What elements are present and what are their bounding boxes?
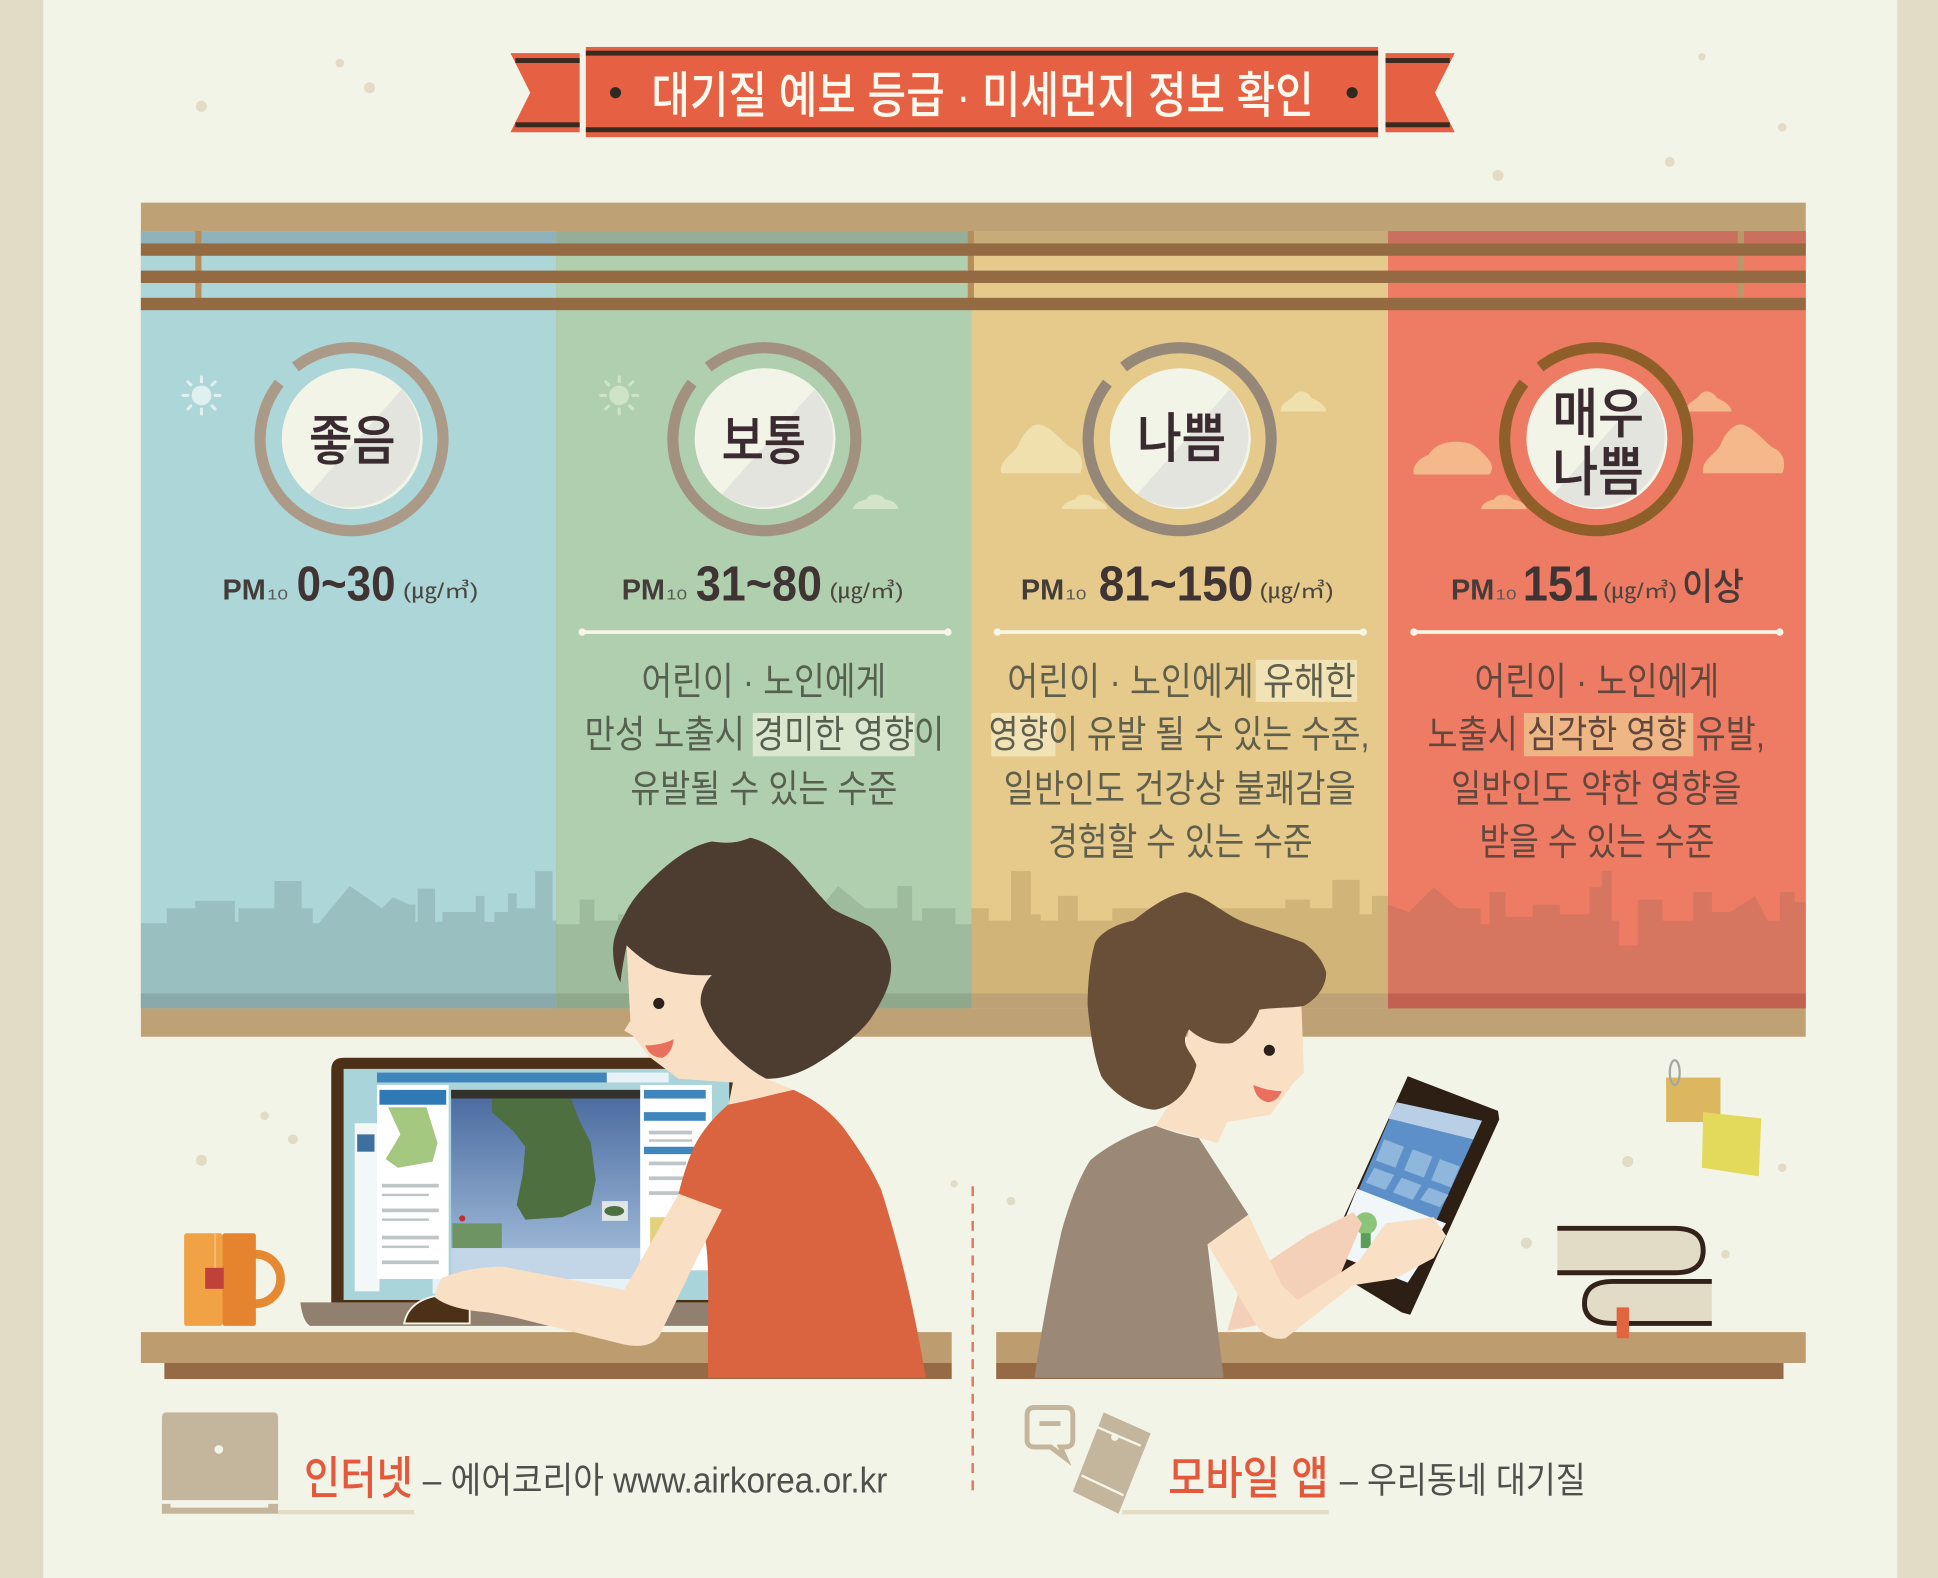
channel detail: – 우리동네 대기질 [1340,1461,1586,1501]
skyline: yellow [971,871,1388,994]
skyline: blue [141,871,556,994]
description: 노출시 심각한 영향 유발, [1428,714,1765,757]
description: 유발될 수 있는 수준 [630,768,897,811]
icon: cloud [853,495,899,509]
grade ring [1088,348,1271,531]
icon: laptop [162,1412,278,1514]
PM value: PM [1021,574,1064,606]
woman shirt [679,1090,926,1378]
browser window back [355,1123,379,1291]
PM value [1021,557,1334,612]
description: 영향이 유발 될 수 있는 수준, [989,714,1369,757]
man hair [1088,892,1326,1110]
divider [1410,628,1784,636]
ribbon left tail [510,53,580,132]
PM value: 151 [1523,557,1598,612]
laptop body [331,1058,735,1304]
man mouth [1253,1085,1282,1102]
panel backgrounds [141,231,1806,1008]
PM value: 10 [1065,587,1086,603]
panel top shadow [141,231,1806,245]
underline [278,1510,414,1514]
PM value: 10 [1496,587,1517,603]
PM value: (㎍/㎥) [829,579,903,604]
woman hair [613,838,891,1079]
channel name: 인터넷 [304,1453,413,1504]
PM value: PM [1451,574,1494,606]
PM value: PM [222,574,266,606]
PM value: (㎍/㎥) [1259,579,1334,604]
panel bottom shade [141,994,1806,1008]
man back arm [1227,1212,1362,1331]
description: 어린이 · 노인에게 [641,660,886,703]
blind cords [195,231,1744,305]
title text: 대기질 예보 등급 · 미세먼지 정보 확인 [651,68,1314,123]
description: 받을 수 있는 수준 [1479,821,1714,864]
icon: sun [601,377,638,414]
mouse [404,1295,470,1323]
icon: books [1557,1228,1712,1338]
description: 어린이 · 노인에게 유해한 [1007,660,1356,703]
panel: normal [578,348,952,811]
title ribbon [510,47,1455,137]
description: 만성 노출시 경미한 영향이 [585,714,944,757]
dashed divider [972,1186,974,1498]
PM value: (㎍/㎥) [403,579,478,604]
grade label: 매우 [1552,386,1644,444]
PM value: 31~80 [696,557,822,612]
PM value [1451,557,1744,612]
PM value: 81~150 [1099,557,1253,612]
footer: mobile [1027,1407,1586,1514]
woman mouth [645,1039,674,1058]
divider [578,628,952,636]
right web panel [640,1085,712,1270]
left web panel [377,1085,449,1279]
icon: sun [183,377,220,414]
icon: phone [1073,1412,1151,1514]
woman face and neck [624,945,793,1107]
icon: mug [184,1233,281,1326]
man arm [1208,1215,1446,1339]
man eye [1264,1045,1275,1056]
icon: clouds [1001,391,1326,509]
description: 일반인도 약한 영향을 [1451,768,1741,811]
PM value: 10 [666,587,687,603]
woman arm [435,1194,722,1346]
laptop base [300,1302,711,1326]
PM value: 0~30 [297,557,396,612]
panel: very bad [1410,348,1784,864]
woman [435,838,926,1378]
tablet [1322,1076,1499,1315]
channel detail: – 에어코리아 www.airkorea.or.kr [423,1461,887,1501]
woman eye [653,998,664,1009]
window [141,203,1806,1037]
PM value: 10 [267,587,288,603]
panel: bad [989,348,1369,864]
underline [1122,1510,1329,1514]
man shirt [1035,1126,1248,1378]
grade label: 나쁨 [1137,410,1226,469]
description [989,660,1369,864]
desk: right [996,1332,1806,1379]
blind slats [141,243,1806,310]
skyline: red [1388,871,1806,994]
description [1428,660,1765,864]
PM value: (㎍/㎥) [1603,579,1677,604]
laptop [300,1058,735,1326]
footer: internet [162,1412,887,1514]
lower bar [433,1279,630,1294]
description: 일반인도 건강상 불쾌감을 [1004,768,1356,811]
man [1035,892,1499,1378]
PM value [222,557,478,612]
desk: left [141,1332,952,1379]
grade label: 나쁨 [1552,444,1644,503]
grade label: 보통 [722,413,806,472]
icon: speech bubble [1027,1407,1073,1458]
divider [994,628,1367,636]
PM value: PM [622,574,665,606]
icon: sticky notes [1666,1060,1761,1176]
description: 어린이 · 노인에게 [1475,660,1719,703]
channel name: 모바일 앱 [1168,1453,1329,1504]
skyline: green [556,886,971,994]
description [585,660,944,811]
ribbon main band [586,47,1378,137]
PM value: 이상 [1682,565,1744,607]
man face and neck [1156,1006,1304,1143]
background dust dots [196,53,1787,1259]
grade ring [673,348,856,531]
PM value [622,557,903,612]
description: 경험할 수 있는 수준 [1048,821,1313,864]
grade label [1552,386,1644,503]
grade ring [1505,348,1688,531]
grade label: 좋음 [309,413,396,472]
browser top bar [377,1073,607,1082]
icon: clouds [1414,391,1784,509]
grade ring [260,348,443,531]
ribbon right tail [1386,53,1455,132]
window frame [141,203,1806,1037]
panel: good [183,348,478,612]
